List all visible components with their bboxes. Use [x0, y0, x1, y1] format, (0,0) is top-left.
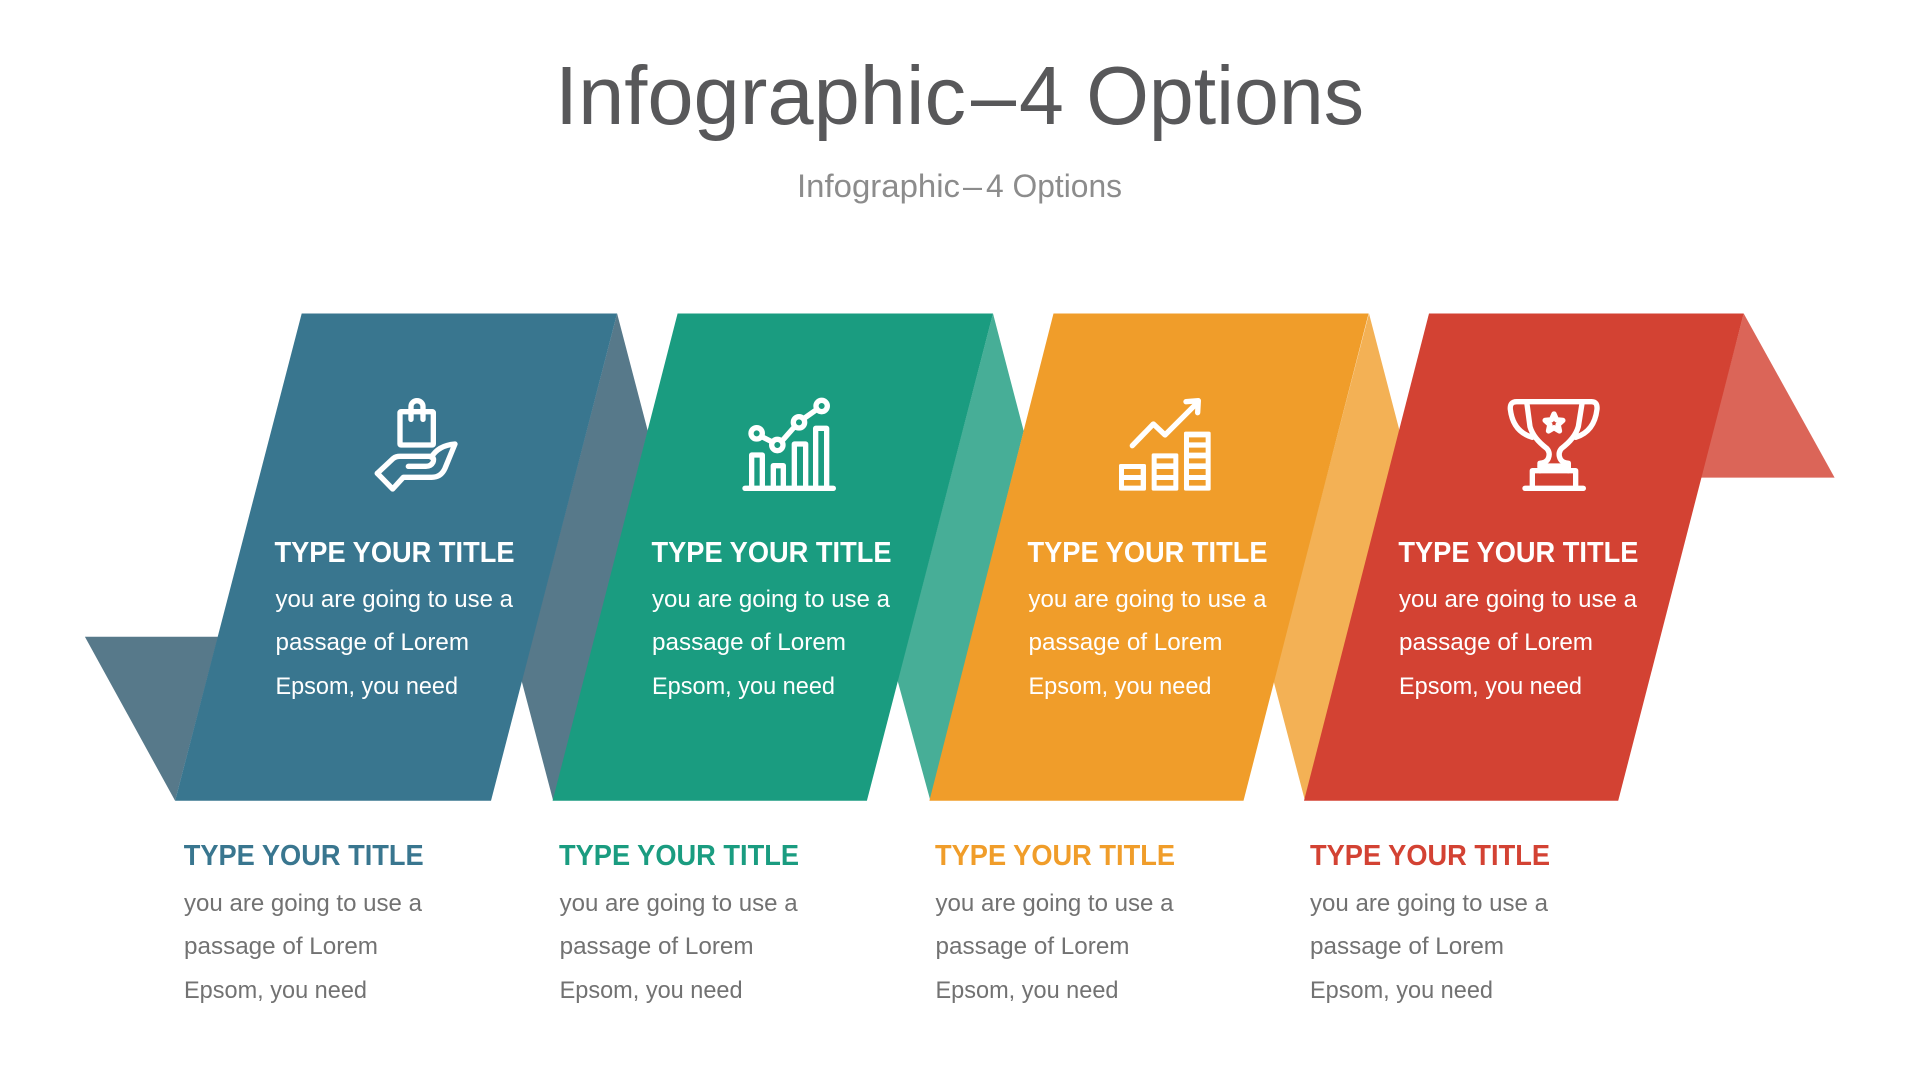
caption: red option: TYPE YOUR TITLE	[1310, 840, 1550, 872]
title: —	[971, 49, 1016, 142]
caption: red option	[1310, 840, 1550, 1004]
caption: green option: you are going to use a	[560, 890, 798, 917]
caption: red option: passage of Lorem	[1310, 933, 1504, 960]
green card text	[652, 537, 892, 700]
green card text: passage of Lorem	[652, 629, 846, 656]
red card text: TYPE YOUR TITLE	[1398, 537, 1638, 569]
caption: orange option: Epsom, you need	[936, 977, 1118, 1004]
blue parallelogram	[175, 314, 617, 801]
green card text: Epsom, you need	[652, 673, 835, 700]
green card text: TYPE YOUR TITLE	[652, 537, 892, 569]
title: Infographic	[555, 49, 966, 142]
green fold	[898, 314, 1024, 801]
title: 4 Options	[1019, 49, 1364, 142]
orange card text: Epsom, you need	[1028, 673, 1212, 700]
caption: orange option: passage of Lorem	[936, 933, 1130, 960]
red card text: passage of Lorem	[1399, 629, 1593, 656]
icon: bar chart with trend line	[745, 400, 833, 488]
blue card text	[274, 537, 514, 700]
caption: red option: Epsom, you need	[1310, 977, 1493, 1004]
orange card text: you are going to use a	[1028, 586, 1267, 613]
orange card text: TYPE YOUR TITLE	[1028, 537, 1268, 569]
subtitle: 4 Options	[986, 168, 1122, 204]
caption: blue option: you are going to use a	[184, 890, 423, 917]
red card text: Epsom, you need	[1399, 673, 1582, 700]
icon: trophy with star	[1510, 402, 1597, 488]
red parallelogram	[1304, 314, 1744, 801]
blue card text: passage of Lorem	[276, 629, 469, 656]
caption: green option: Epsom, you need	[560, 977, 743, 1004]
subtitle: Infographic	[797, 168, 960, 204]
icon: rising coin stacks	[1119, 401, 1211, 491]
caption: green option: passage of Lorem	[560, 933, 754, 960]
blue card text: Epsom, you need	[276, 673, 458, 700]
orange card text	[1028, 537, 1268, 700]
blue fold	[522, 314, 648, 801]
panel: orange option	[929, 314, 1400, 801]
orange fold	[1274, 314, 1400, 801]
caption: blue option: TYPE YOUR TITLE	[184, 840, 424, 872]
caption: green option	[559, 840, 799, 1004]
caption: orange option: TYPE YOUR TITLE	[935, 840, 1175, 872]
panel: blue option	[85, 314, 648, 801]
left tail triangle	[85, 637, 218, 801]
panel: green option	[553, 314, 1024, 801]
blue card text: you are going to use a	[276, 586, 514, 613]
panel: red option	[1304, 314, 1835, 801]
orange card text: passage of Lorem	[1028, 629, 1222, 656]
green card text: you are going to use a	[652, 586, 891, 613]
caption: blue option: passage of Lorem	[184, 933, 378, 960]
subtitle: —	[963, 168, 982, 204]
icon: hand holding shopping bag	[377, 401, 455, 489]
blue card text: TYPE YOUR TITLE	[274, 537, 514, 569]
caption: red option: you are going to use a	[1310, 890, 1549, 917]
caption: green option: TYPE YOUR TITLE	[559, 840, 799, 872]
caption: blue option	[184, 840, 424, 1004]
orange parallelogram	[929, 314, 1369, 801]
caption: orange option: you are going to use a	[936, 890, 1174, 917]
right tail triangle	[1701, 314, 1835, 478]
caption: blue option: Epsom, you need	[184, 977, 367, 1004]
red card text	[1398, 537, 1638, 700]
red card text: you are going to use a	[1399, 586, 1638, 613]
green parallelogram	[553, 314, 993, 801]
caption: orange option	[935, 840, 1175, 1004]
